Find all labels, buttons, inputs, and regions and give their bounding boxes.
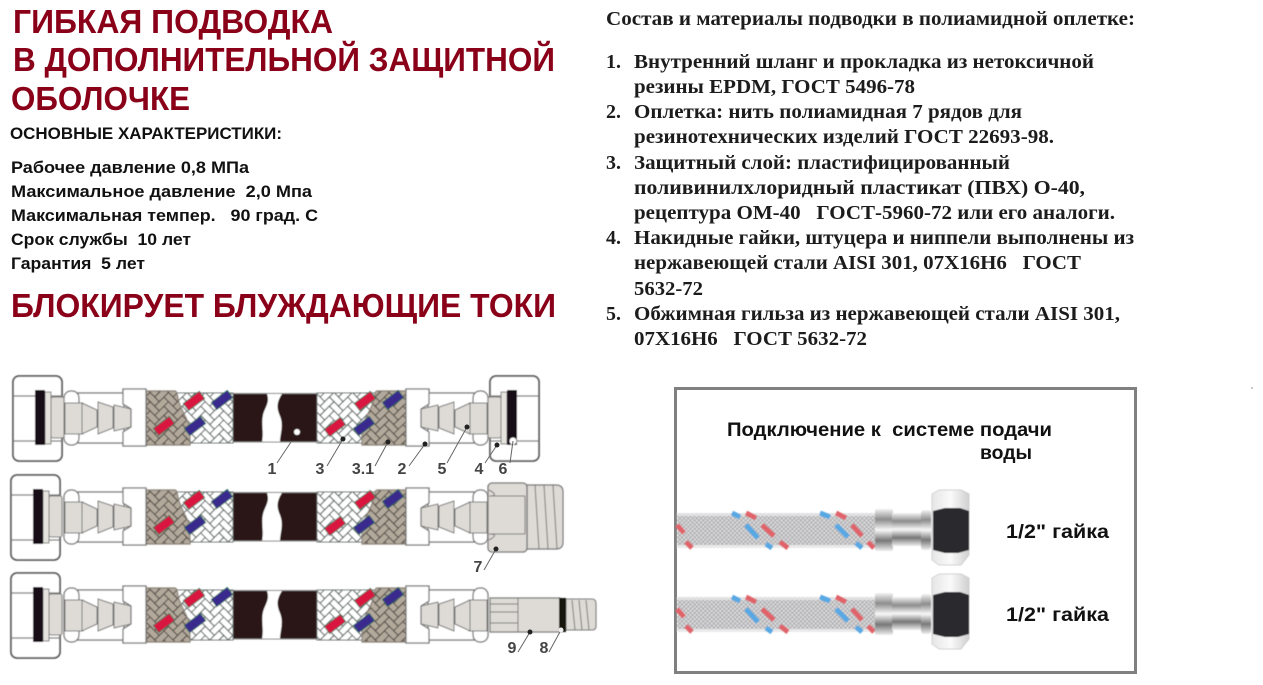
text block: materials list: 2.: [606, 101, 621, 123]
text block: materials list: Накидные гайки, штуцера и ниппели выполнены из: [634, 227, 1134, 249]
title: В ДОПОЛНИТЕЛЬНОЙ ЗАЩИТНОЙ: [13, 40, 555, 78]
callout numbers: hose parts: [268, 424, 513, 478]
title: [11, 3, 555, 117]
panel: connection photo: [676, 388, 1136, 672]
text block: materials list: [606, 51, 1134, 350]
label: upper nut size: 1/2" гайка: [1006, 522, 1109, 543]
callout numbers: 9 and 8: 9: [508, 640, 517, 657]
text block: characteristics list: Максимальная темпер. 90 град. С: [11, 206, 318, 225]
icon: threaded coupling: [488, 483, 563, 552]
text block: characteristics list: Рабочее давление 0,8 МПа: [11, 158, 250, 177]
callout numbers: hose parts: 3.1: [352, 461, 374, 478]
callout number: 7: 7: [474, 559, 483, 576]
text block: characteristics list: [11, 158, 318, 273]
callout numbers: hose parts: 4: [475, 461, 484, 478]
text block: materials list: 4.: [606, 227, 621, 249]
heading: connection to the supply system: [727, 420, 1052, 464]
text block: materials list: 1.: [606, 51, 621, 73]
text block: characteristics list: Гарантия 5 лет: [11, 254, 145, 273]
label: lower nut size: 1/2" гайка: [1006, 605, 1109, 626]
title: ОБОЛОЧКЕ: [11, 80, 190, 117]
title: ГИБКАЯ ПОДВОДКА: [13, 3, 333, 40]
callout numbers: hose parts: 6: [499, 461, 508, 478]
callout number: 7: [474, 546, 498, 576]
text block: materials list: 5.: [606, 303, 621, 325]
heading: connection to the supply system: Подключение к системе подачи: [727, 420, 1052, 441]
diagram: hose with two nuts: [13, 376, 539, 478]
diagram: hose with nut and coupling: [11, 475, 563, 576]
heading: main characteristics: ОСНОВНЫЕ ХАРАКТЕРИСТИКИ:: [10, 124, 282, 143]
icon: threaded male fitting: [490, 598, 596, 632]
text block: materials list: 3.: [606, 152, 621, 174]
callout numbers: hose parts: 1: [268, 461, 277, 478]
text block: characteristics list: Максимальное давление 2,0 Мпа: [11, 182, 313, 201]
callout numbers: 9 and 8: 8: [540, 640, 549, 657]
diagram: hose with nut and male fitting: [11, 573, 596, 658]
callout numbers: 9 and 8: [508, 628, 564, 657]
text block: characteristics list: Срок службы 10 лет: [11, 230, 191, 249]
text block: materials list: поливинилхлоридный пластикат (ПВХ) О-40,: [634, 177, 1085, 199]
heading: connection to the supply system: воды: [980, 443, 1032, 464]
heading: composition and materials: Состав и материалы подводки в полиамидной оплетке:: [606, 8, 1135, 30]
callout numbers: hose parts: 2: [398, 461, 407, 478]
text block: materials list: резины EPDM, ГОСТ 5496-78: [634, 76, 915, 98]
callout: blocks stray currents: БЛОКИРУЕТ БЛУЖДАЮЩИЕ ТОКИ: [11, 287, 556, 324]
text block: materials list: Внутренний шланг и прокладка из нетоксичной: [634, 51, 1094, 73]
photo: upper braided hose: [677, 490, 969, 565]
text block: materials list: Оплетка: нить полиамидная 7 рядов для: [634, 101, 1022, 123]
text block: materials list: нержавеющей стали AISI 301, 07Х16Н6 ГОСТ: [634, 252, 1082, 274]
text block: materials list: Защитный слой: пластифицированный: [634, 152, 1010, 174]
callout numbers: hose parts: 5: [438, 461, 447, 478]
callout numbers: hose parts: 3: [316, 461, 325, 478]
text block: materials list: Обжимная гильза из нержавеющей стали AISI 301,: [634, 303, 1120, 325]
text block: materials list: резинотехнических изделий ГОСТ 22693-98.: [634, 126, 1054, 148]
text block: materials list: 5632-72: [634, 278, 703, 300]
text block: materials list: 07Х16Н6 ГОСТ 5632-72: [634, 328, 867, 350]
text block: materials list: рецептура ОМ-40 ГОСТ-5960-72 или его аналоги.: [634, 202, 1115, 224]
photo: lower braided hose: [677, 574, 969, 649]
